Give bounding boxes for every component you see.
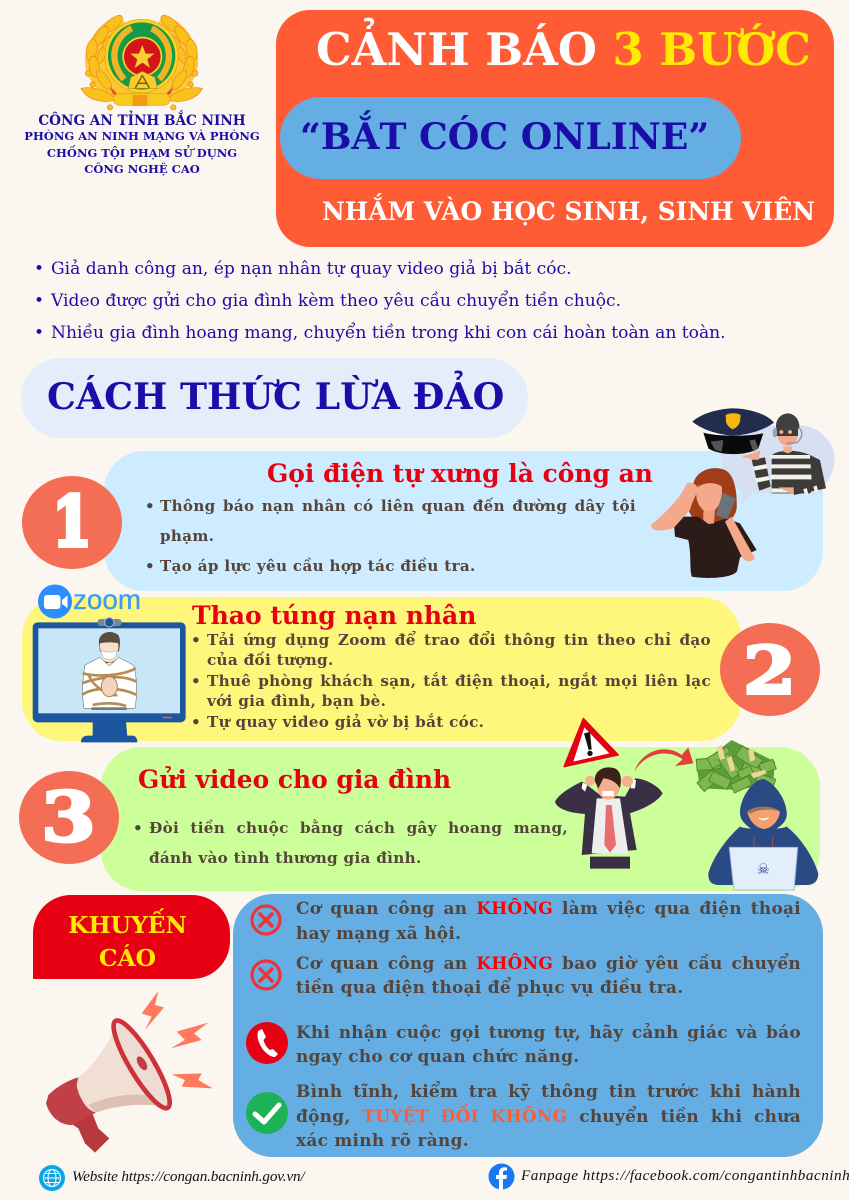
step 1 heading: Gọi điện tự xưng là công an xyxy=(267,459,653,488)
intro bullets: Video được gửi cho gia đình kèm theo yêu cầu chuyển tiền chuộc. xyxy=(51,291,621,311)
icon: cross 1 xyxy=(250,904,282,936)
step 2 heading: Thao túng nạn nhân xyxy=(192,601,476,630)
illustration: computer monitor with tied-up man xyxy=(32,617,186,742)
step 2 text xyxy=(191,630,711,731)
panel: step 1 xyxy=(104,451,823,591)
illustration: scam call, woman and fake policeman xyxy=(651,408,835,578)
step 3 heading: Gửi video cho gia đình xyxy=(138,765,451,794)
footer: website xyxy=(39,1165,306,1191)
title panel xyxy=(276,10,834,247)
red arrow xyxy=(634,747,693,772)
step 1 text: • xyxy=(145,557,155,575)
step 1 text xyxy=(145,497,636,575)
hacker with laptop xyxy=(708,779,818,890)
intro bullets: • xyxy=(34,291,44,311)
icon: cross 2 xyxy=(250,959,282,991)
logo: zoom: zoom xyxy=(73,584,141,615)
recommendation text: Cơ quan công an KHÔNG làm việc qua điện thoại xyxy=(296,898,801,918)
panel: step 3 xyxy=(101,747,820,891)
organisation name: CÔNG AN TỈNH BẮC NINH xyxy=(38,113,246,129)
step 2 text: • xyxy=(191,631,201,649)
recommendation text: hay mạng xã hội. xyxy=(296,923,461,943)
emblem: police crest xyxy=(80,15,203,110)
step 2 text: • xyxy=(191,672,201,690)
organisation name: PHÒNG AN NINH MẠNG VÀ PHÒNG xyxy=(24,129,260,143)
step 1 text: Tạo áp lực yêu cầu hợp tác điều tra. xyxy=(160,557,476,575)
recommendation text: Bình tĩnh, kiểm tra kỹ thông tin trước khi hành xyxy=(296,1081,801,1101)
audience line: NHẮM VÀO HỌC SINH, SINH VIÊN xyxy=(322,197,815,226)
step 1 text: phạm. xyxy=(160,527,214,545)
section heading pill: CÁCH THỨC LỪA ĐẢO xyxy=(47,375,504,418)
thief xyxy=(742,413,826,495)
recommendation text: tiền qua điện thoại để phục vụ điều tra. xyxy=(296,977,683,997)
icon: globe xyxy=(39,1165,65,1191)
step 3 text xyxy=(133,819,568,867)
recommendation text: Khi nhận cuộc gọi tương tự, hãy cảnh giác và báo xyxy=(296,1022,801,1042)
recommendation text: xác minh rõ ràng. xyxy=(296,1130,469,1150)
recommendation text: động, TUYỆT ĐỐI KHÔNG chuyển tiền khi chưa xyxy=(296,1106,801,1126)
step number 2 xyxy=(720,623,820,716)
subtitle pill: “BẮT CÓC ONLINE” xyxy=(300,115,709,158)
subtitle pill xyxy=(280,97,741,179)
step 1 text: Thông báo nạn nhân có liên quan đến đường dây tội xyxy=(160,497,636,515)
intro bullets: • xyxy=(34,323,44,343)
hacker with laptop: ☠ xyxy=(757,861,770,878)
panel: recommendations xyxy=(233,894,823,1157)
step number 1 xyxy=(22,476,122,569)
step number 3 xyxy=(19,771,119,864)
illustration: megaphone xyxy=(46,991,212,1152)
speech bubble xyxy=(721,426,835,505)
warning label: CÁO xyxy=(99,944,156,972)
step 2 text: với gia đình, bạn bè. xyxy=(207,692,386,710)
step 2 text: Tải ứng dụng Zoom để trao đổi thông tin theo chỉ đạo xyxy=(207,631,711,649)
footer: fanpage xyxy=(488,1164,849,1190)
step 2 text: • xyxy=(191,713,201,731)
section heading pill xyxy=(21,358,528,438)
panicked man xyxy=(555,767,663,869)
step 3 text: đánh vào tình thương gia đình. xyxy=(149,849,422,867)
woman on the phone xyxy=(651,468,757,578)
police cap xyxy=(692,408,774,454)
step number 3: 3 xyxy=(41,778,96,858)
intro bullets: Nhiều gia đình hoang mang, chuyển tiền trong khi con cái hoàn toàn an toàn. xyxy=(51,323,726,343)
icon: phone xyxy=(246,1022,288,1064)
step 2 text: Tự quay video giả vờ bị bắt cóc. xyxy=(207,713,484,731)
panel: step 2 xyxy=(22,597,741,741)
intro bullets: • xyxy=(34,259,44,279)
main title: CẢNH BÁO 3 BƯỚC xyxy=(316,23,811,76)
money pile xyxy=(696,740,776,793)
warning label: KHUYẾN xyxy=(68,911,187,939)
step 3 text: • xyxy=(133,819,143,837)
step number 1: 1 xyxy=(53,482,91,562)
organisation name: CHỐNG TỘI PHẠM SỬ DỤNG xyxy=(47,146,237,160)
intro bullets xyxy=(34,259,726,343)
step 3 text: Đòi tiền chuộc bằng cách gây hoang mang, xyxy=(149,819,568,837)
intro bullets: Giả danh công an, ép nạn nhân tự quay video giả bị bắt cóc. xyxy=(51,259,572,279)
step 1 text: • xyxy=(145,497,155,515)
logo: zoom xyxy=(38,584,141,618)
icon: facebook xyxy=(488,1164,514,1190)
step 2 text: Thuê phòng khách sạn, tắt điện thoại, ngắt mọi liên lạc xyxy=(207,672,711,690)
organisation name xyxy=(24,110,260,176)
recommendation text xyxy=(296,898,801,1150)
footer: fanpage: Fanpage https://facebook.com/congantinhbacninh xyxy=(521,1167,849,1184)
recommendation text: ngay cho cơ quan chức năng. xyxy=(296,1046,579,1066)
recommendation text: Cơ quan công an KHÔNG bao giờ yêu cầu chuyển xyxy=(296,953,801,973)
step number 2: 2 xyxy=(743,631,796,709)
tied-up man xyxy=(82,632,137,710)
warning sign xyxy=(564,718,618,767)
organisation name: CÔNG NGHỆ CAO xyxy=(84,162,200,176)
warning label xyxy=(33,895,230,979)
step 2 text: của đối tượng. xyxy=(207,651,334,669)
icon: check xyxy=(246,1092,288,1134)
illustration: warning, panicked man, money and hacker xyxy=(555,718,818,890)
footer: website: Website https://congan.bacninh.gov.vn/ xyxy=(72,1168,305,1185)
